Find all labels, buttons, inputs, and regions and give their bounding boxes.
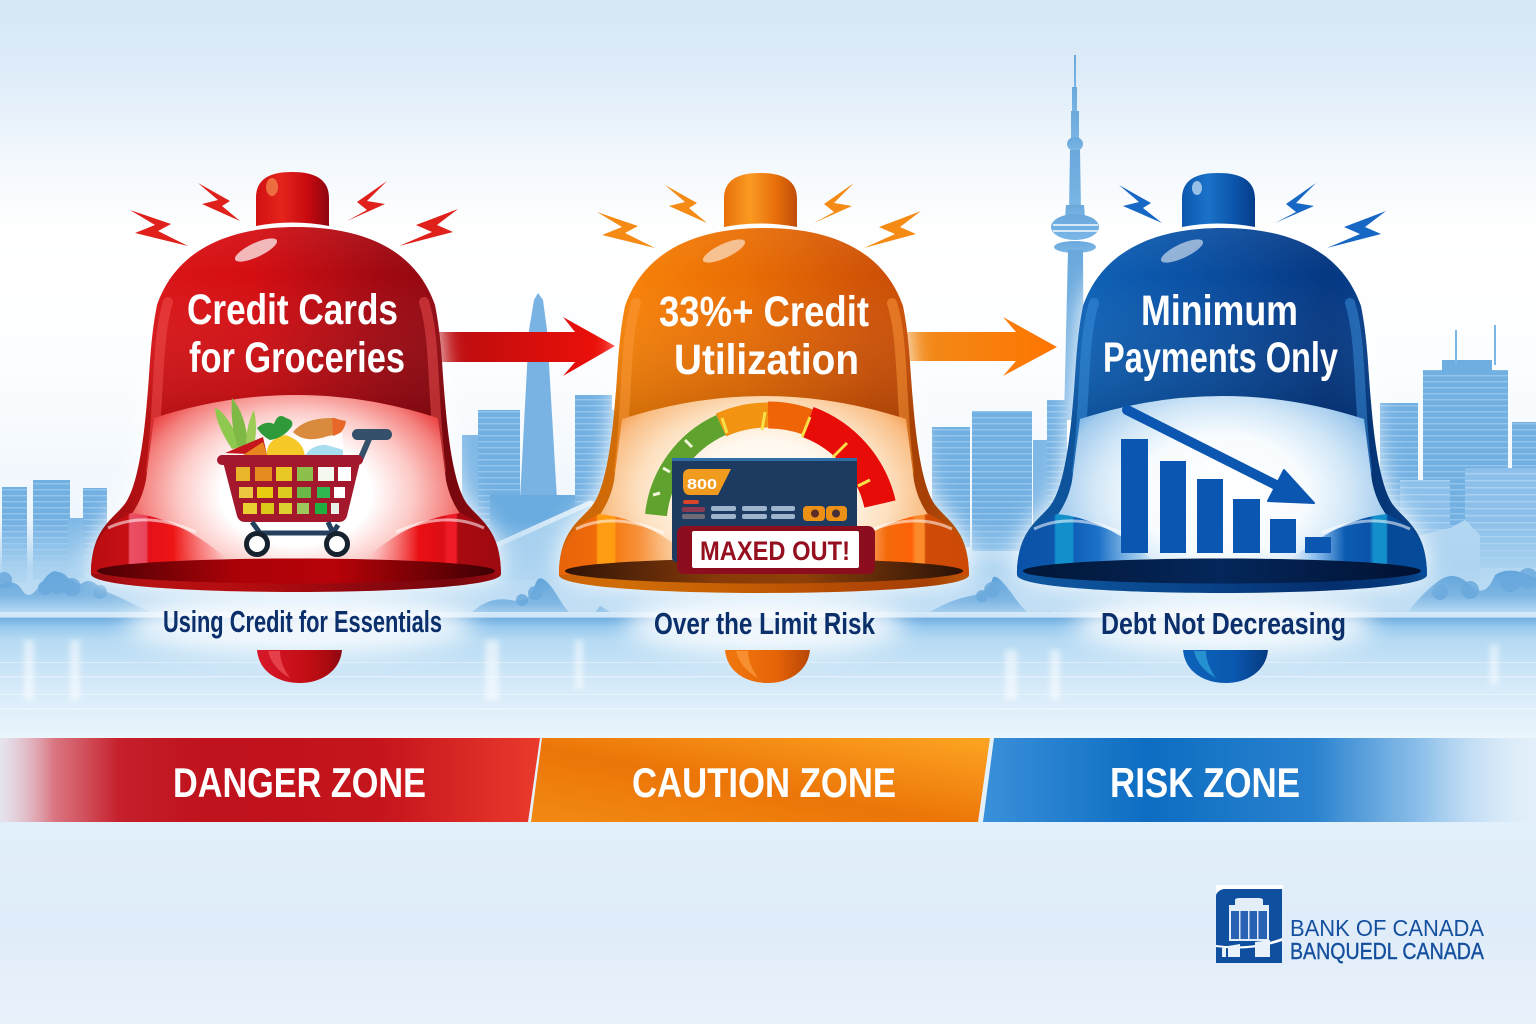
logo text: BANK OF CANADA bbox=[1290, 915, 1485, 941]
lower background bbox=[0, 822, 1536, 1024]
risk zone segment: RISK ZONE bbox=[1110, 759, 1300, 806]
glow bbox=[1017, 227, 1427, 592]
panel: orange bell bbox=[559, 173, 969, 683]
right buildings bbox=[1380, 403, 1418, 523]
bell body bbox=[91, 227, 501, 592]
danger zone segment: DANGER ZONE bbox=[173, 759, 426, 806]
skyline silhouette bbox=[0, 55, 1536, 619]
cart handle bbox=[360, 432, 372, 460]
bell title bbox=[659, 288, 869, 384]
bell title: Minimum bbox=[1141, 287, 1298, 335]
bell title: 33%+ Credit bbox=[659, 288, 869, 336]
credit gauge bbox=[653, 412, 880, 515]
risk zone segment bbox=[983, 738, 1536, 822]
bell cap bbox=[724, 173, 797, 227]
downward arrow bbox=[1127, 410, 1314, 503]
badge number: 800 bbox=[687, 476, 717, 493]
zone banner bbox=[0, 738, 1536, 822]
caution zone segment bbox=[531, 738, 990, 822]
bell title: Payments Only bbox=[1103, 334, 1338, 382]
bell title bbox=[187, 286, 405, 382]
bell title: for Groceries bbox=[189, 334, 405, 382]
logo: Bank of Canada bbox=[1216, 885, 1485, 964]
credit card bbox=[672, 458, 857, 562]
bell clapper bbox=[725, 650, 810, 683]
produce bbox=[215, 398, 346, 457]
panel: red bell bbox=[91, 172, 501, 683]
bell cap bbox=[1182, 173, 1255, 227]
central-right buildings bbox=[932, 427, 970, 547]
bell caption: Using Credit for Essentials bbox=[163, 604, 442, 639]
panel: blue bell bbox=[1017, 173, 1427, 683]
danger zone segment bbox=[0, 738, 540, 822]
bell caption: Over the Limit Risk bbox=[654, 606, 876, 641]
icon: red lightning bolts bbox=[130, 181, 458, 246]
bell clapper bbox=[1183, 650, 1268, 683]
central-left buildings bbox=[462, 435, 484, 525]
icon: orange lightning bolts bbox=[597, 183, 921, 248]
water bbox=[0, 612, 1536, 738]
bell body bbox=[1017, 228, 1427, 593]
logo text bbox=[1290, 915, 1485, 964]
caution zone segment: CAUTION ZONE bbox=[632, 759, 896, 806]
bell caption: Debt Not Decreasing bbox=[1101, 606, 1346, 641]
glow bbox=[91, 227, 501, 592]
CN Tower bbox=[1051, 55, 1099, 420]
bell title: Utilization bbox=[674, 336, 859, 384]
left buildings bbox=[2, 487, 27, 582]
bell cap bbox=[256, 172, 329, 226]
bell clapper bbox=[257, 650, 342, 683]
maxed out badge bbox=[677, 526, 875, 574]
bell body bbox=[559, 228, 969, 593]
cart wheels bbox=[252, 522, 338, 533]
connector arrow: orange bbox=[905, 317, 1057, 376]
declining bar chart bbox=[1121, 410, 1331, 553]
logo text: BANQUEDL CANADA bbox=[1290, 938, 1485, 964]
icon: grocery cart bbox=[215, 398, 392, 554]
logo mark bbox=[1216, 885, 1283, 963]
tree line bbox=[0, 571, 1536, 619]
background sky bbox=[0, 0, 1536, 620]
bell title: Credit Cards bbox=[187, 286, 398, 334]
icon: blue lightning bolts bbox=[1119, 183, 1386, 248]
connector arrow: red bbox=[437, 317, 615, 376]
bell title bbox=[1103, 287, 1338, 382]
maxed out badge: MAXED OUT! bbox=[700, 536, 850, 566]
glow bbox=[559, 227, 969, 592]
cart basket bbox=[222, 458, 361, 522]
shoreline haze bbox=[0, 520, 1536, 615]
